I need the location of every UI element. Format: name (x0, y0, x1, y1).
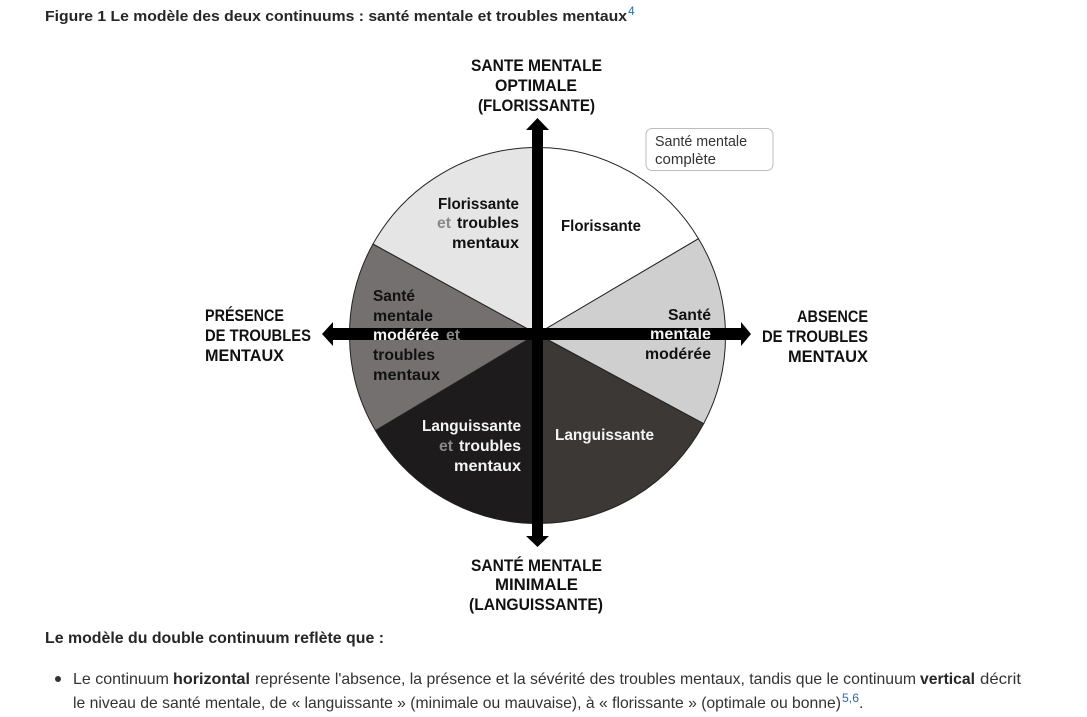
label: languissante et troubles mentaux (422, 418, 521, 475)
axis label: left (205, 306, 311, 365)
arrow: vertical axis (526, 118, 549, 547)
callout: santé mentale complète (646, 128, 773, 170)
callout: santé mentale complète: Santé mentale (655, 133, 747, 150)
label: languissante et troubles mentaux: mentaux (454, 458, 521, 475)
axis label: right: DE TROUBLES (762, 327, 868, 346)
bullet text block: représente l'absence, la présence et la sévérité des troubles mentaux, tandis que le continuum (255, 671, 916, 688)
bullet text block: horizontal (173, 671, 250, 688)
subheading: Le modèle du double continuum reflète que : (45, 630, 384, 647)
figure title: Figure 1 Le modèle des deux continuums : santé mentale et troubles mentaux (45, 8, 628, 25)
axis label: top (471, 56, 602, 115)
axis label: right (762, 307, 869, 366)
axis label: left: MENTAUX (205, 346, 285, 365)
axis label: left: DE TROUBLES (205, 326, 311, 345)
bullet text block: 5,6 (842, 691, 859, 705)
axis label: top: OPTIMALE (495, 76, 577, 95)
axis label: bottom (469, 556, 603, 614)
axis label: top: (FLORISSANTE) (478, 96, 595, 115)
label: languissante: Languissante (555, 427, 654, 444)
label: santé mentale modérée et troubles mentaux (373, 288, 461, 384)
label: florissante et troubles mentaux: troubles (457, 215, 519, 232)
axis label: right: MENTAUX (788, 347, 869, 366)
label: languissante et troubles mentaux: troubles (459, 438, 521, 455)
sector: santé mentale modérée et troubles mentaux (349, 244, 537, 430)
sector: languissante (537, 334, 704, 524)
figure title: 4 (628, 4, 635, 18)
label: florissante et troubles mentaux (437, 196, 519, 252)
callout: santé mentale complète: complète (655, 151, 716, 168)
label: santé mentale modérée: Santé (668, 307, 711, 324)
sector: languissante et troubles mentaux (376, 334, 537, 524)
bullet text block (55, 671, 1022, 712)
label: santé mentale modérée (645, 307, 711, 363)
sector: santé mentale modérée (537, 239, 726, 424)
label: santé mentale modérée et troubles mentaux: Santé (373, 288, 415, 305)
bullet text block: décrit (980, 671, 1022, 688)
label: florissante et troubles mentaux: mentaux (452, 235, 519, 252)
label: florissante et troubles mentaux: et (437, 215, 452, 232)
label: languissante et troubles mentaux: Languissante (422, 418, 521, 435)
label: languissante et troubles mentaux: et (439, 438, 454, 455)
axis label: right: ABSENCE (797, 307, 868, 326)
bullet marker (55, 676, 61, 682)
label: santé mentale modérée et troubles mentaux: modérée (373, 327, 439, 344)
chart: two continua pie (322, 118, 751, 547)
label: santé mentale modérée et troubles mentaux: et (446, 327, 461, 344)
axis label: top: SANTE MENTALE (471, 56, 602, 75)
sector: florissante (537, 148, 698, 334)
label: santé mentale modérée: mentale (650, 326, 711, 343)
bullet text block: vertical (920, 671, 975, 688)
arrow: horizontal axis (322, 322, 751, 346)
axis label: bottom: MINIMALE (495, 575, 578, 594)
bullet text block: . (859, 695, 863, 712)
axis label: left: PRÉSENCE (205, 306, 284, 325)
bullet text block: Le continuum (73, 671, 169, 688)
label: florissante: Florissante (561, 218, 641, 235)
sector: florissante et troubles mentaux (373, 147, 537, 334)
label: santé mentale modérée et troubles mentaux: mentale (373, 308, 433, 325)
axis label: bottom: SANTÉ MENTALE (471, 556, 602, 575)
label: santé mentale modérée: modérée (645, 346, 711, 363)
label: santé mentale modérée et troubles mentaux: mentaux (373, 367, 440, 384)
label: florissante et troubles mentaux: Florissante (438, 196, 519, 213)
axis label: bottom: (LANGUISSANTE) (469, 595, 603, 614)
label: santé mentale modérée et troubles mentaux: troubles (373, 347, 435, 364)
bullet text block: le niveau de santé mentale, de « languissante » (minimale ou mauvaise), à « florissante » (optimale ou bonne) (73, 695, 841, 712)
